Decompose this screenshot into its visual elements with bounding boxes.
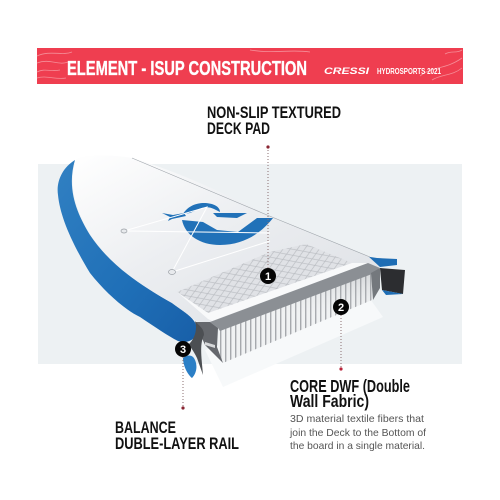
marker 3 (175, 341, 191, 357)
textured deck pad (177, 244, 352, 313)
pad front strip (177, 263, 368, 321)
marker 1 (260, 268, 276, 284)
board illustration (58, 155, 405, 387)
brand year: HYDROSPORTS 2021 (377, 67, 441, 76)
heading: core DWF: CORE DWF (Double (290, 376, 410, 396)
dark flap (188, 321, 204, 375)
marker 2 (333, 299, 349, 315)
brand logo: CRESSI (324, 66, 369, 77)
callout 1 leader (266, 145, 270, 268)
dark core end (371, 268, 380, 300)
blue rear rail (357, 255, 403, 295)
drop-stitch core (218, 272, 372, 363)
blue mermaid logo (162, 203, 273, 245)
heading: deck pad: DECK PAD (207, 119, 270, 138)
grey deck edge (210, 263, 380, 331)
bungee cords (124, 207, 270, 272)
deck outline highlight (132, 158, 370, 257)
marker 3: 3 (180, 344, 186, 356)
blue side rail (58, 160, 197, 342)
heading: deck pad: NON-SLIP TEXTURED (207, 103, 341, 122)
heading: balance rail: DUBLE-LAYER RAIL (115, 434, 239, 453)
ground shadow (205, 296, 383, 387)
marker 1: 1 (265, 271, 271, 283)
heading: core DWF (290, 376, 410, 411)
core top shading (218, 272, 372, 363)
description: core DWF: join the Deck to the Bottom of (289, 427, 426, 439)
heading: balance rail: BALANCE (115, 418, 176, 437)
heading: core DWF: Wall Fabric) (290, 391, 369, 411)
banner title: ELEMENT - ISUP CONSTRUCTION (67, 58, 307, 80)
core side stripe (205, 342, 215, 348)
description: core DWF (289, 413, 426, 452)
description: core DWF: the board in a single material. (290, 440, 425, 452)
blue bottom flap (183, 356, 196, 378)
deck fittings (121, 229, 176, 274)
marker 2: 2 (338, 302, 344, 314)
callout 2 leader (339, 315, 343, 371)
callout 3 leader (181, 357, 185, 410)
heading: deck pad (207, 103, 341, 138)
background panel (38, 164, 462, 364)
black rear tail (380, 268, 405, 294)
red title banner (37, 48, 463, 84)
white deck (73, 155, 380, 323)
description: core DWF: 3D material textile fibers that (290, 413, 424, 425)
dark core left side (195, 322, 223, 363)
heading: balance rail (115, 418, 239, 453)
